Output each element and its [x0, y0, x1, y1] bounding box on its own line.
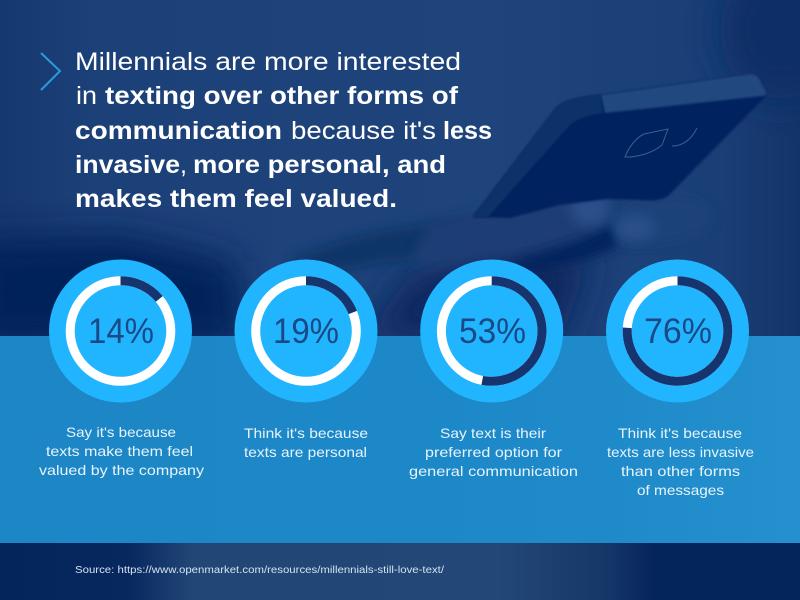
heading: [75, 48, 492, 213]
caption 53%: [409, 425, 578, 479]
caption 76%: Think it's because: [618, 425, 742, 441]
stat 53%: 53%: [459, 312, 526, 351]
caption 53%: preferred option for: [425, 444, 562, 460]
caption 53%: general communication: [409, 463, 578, 479]
hand: thumb and fingers: [414, 200, 656, 268]
heading: communication: [75, 117, 282, 145]
stat 14%: [49, 260, 192, 402]
middle band: [0, 336, 800, 543]
stat 76%: 76%: [644, 312, 712, 351]
heading: texting over other forms of: [105, 82, 459, 110]
caption 76%: than other forms: [621, 463, 740, 479]
stat 76%: [606, 260, 749, 402]
chevron icon: [41, 53, 60, 90]
source line: Source: https://www.openmarket.com/resources/millennials-still-love-text/: [75, 565, 444, 576]
heading: in: [76, 82, 97, 110]
caption 19%: Think it's because: [244, 425, 368, 441]
heading: Millennials are more interested: [75, 48, 461, 76]
heading: invasive: [75, 151, 180, 179]
heading: less: [443, 117, 492, 145]
caption 19%: texts are personal: [244, 444, 367, 460]
caption 76%: of messages: [637, 482, 724, 498]
stat 14%: 14%: [88, 312, 154, 351]
caption 14%: valued by the company: [39, 462, 204, 478]
heading: because it's: [291, 117, 436, 145]
bottom band: [0, 543, 800, 600]
stat 53%: [420, 260, 563, 402]
stat 19%: [234, 260, 378, 402]
heading: makes them feel valued.: [75, 185, 397, 213]
caption 14%: Say it's because: [66, 424, 176, 440]
caption 19%: [244, 425, 368, 460]
heading: more personal, and: [193, 151, 446, 179]
caption 14%: texts make them feel: [46, 443, 193, 459]
caption 76%: texts are less invasive: [607, 444, 754, 460]
heading: ,: [180, 151, 187, 179]
caption 53%: Say text is their: [440, 425, 546, 441]
stat 19%: 19%: [273, 312, 339, 351]
phone: [473, 74, 766, 218]
caption 14%: [39, 424, 204, 478]
caption 76%: [607, 425, 754, 498]
